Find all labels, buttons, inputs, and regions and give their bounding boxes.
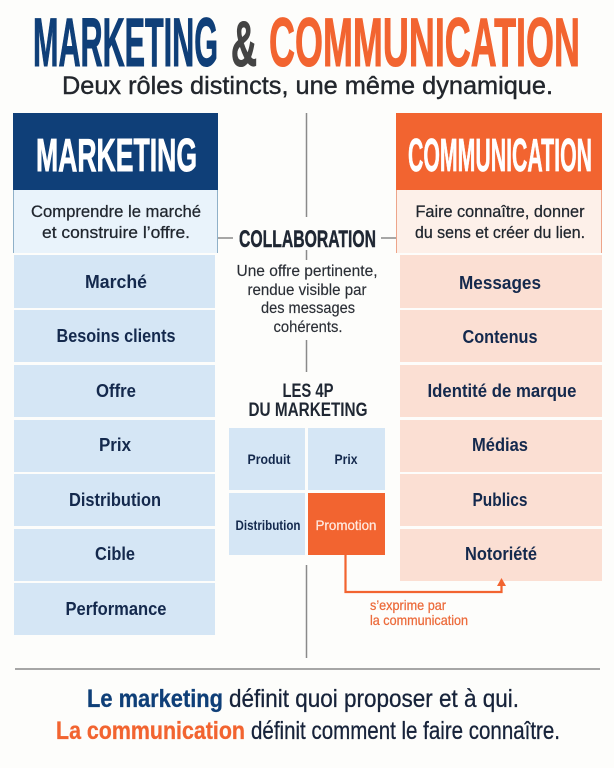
4P heading: LES 4P <box>282 381 334 402</box>
conclusion: La communication <box>56 717 245 745</box>
conclusion: Le marketing <box>87 685 223 713</box>
communication description: Faire connaître, donner <box>416 203 585 221</box>
cell: distribution <box>229 493 305 555</box>
communication list: Identité de marque <box>428 380 576 401</box>
marketing list: Distribution <box>69 489 161 510</box>
4P heading <box>248 381 368 421</box>
cell: promotion: Promotion <box>316 517 376 533</box>
conclusion <box>56 685 560 745</box>
cell: produit <box>229 428 305 490</box>
communication list: Publics <box>472 489 528 510</box>
marketing list <box>14 255 215 635</box>
cell: distribution: Distribution <box>236 517 300 533</box>
cell: produit: Produit <box>248 451 291 467</box>
communication list: Médias <box>472 434 528 455</box>
panel: marketing <box>13 113 218 635</box>
communication description: du sens et créer du lien. <box>415 224 585 242</box>
arrow label: la communication <box>370 612 468 628</box>
communication list: Messages <box>459 272 541 293</box>
cell: prix: Prix <box>334 451 358 467</box>
marketing list: Marché <box>85 271 147 292</box>
marketing list: Offre <box>96 380 136 401</box>
4P grid <box>229 428 385 555</box>
communication list: Contenus <box>462 326 538 347</box>
marketing list: Performance <box>66 598 166 619</box>
title: & <box>231 8 257 80</box>
4P heading: DU MARKETING <box>248 400 368 421</box>
collaboration heading: COLLABORATION <box>239 226 376 253</box>
marketing header <box>13 113 218 190</box>
marketing description <box>13 190 218 253</box>
subtitle: Deux rôles distincts, une même dynamique. <box>62 72 553 100</box>
collaboration text: rendue visible par <box>248 282 367 299</box>
cell: prix <box>308 428 385 490</box>
cell: promotion <box>308 493 385 555</box>
communication list: Notoriété <box>465 543 537 564</box>
marketing header: MARKETING <box>36 129 197 181</box>
marketing description: Comprendre le marché <box>31 203 201 221</box>
collaboration text: cohérents. <box>274 319 342 336</box>
communication header <box>396 113 602 190</box>
communication description <box>396 190 602 253</box>
panel: communication <box>396 113 602 581</box>
collaboration text <box>236 263 378 336</box>
arrow label <box>370 597 468 628</box>
center divider <box>218 113 396 658</box>
conclusion: définit quoi proposer et à qui. <box>229 685 519 713</box>
marketing list: Prix <box>99 434 132 455</box>
communication list <box>400 255 602 581</box>
marketing list: Cible <box>95 543 135 564</box>
collaboration text: des messages <box>261 300 355 317</box>
collaboration text: Une offre pertinente, <box>236 263 378 280</box>
marketing description: et construire l’offre. <box>42 224 190 242</box>
title: MARKETING <box>33 4 218 81</box>
marketing list: Besoins clients <box>56 325 176 346</box>
arrow label: s’exprime par <box>370 597 446 613</box>
arrow: promotion to communication <box>346 555 506 592</box>
